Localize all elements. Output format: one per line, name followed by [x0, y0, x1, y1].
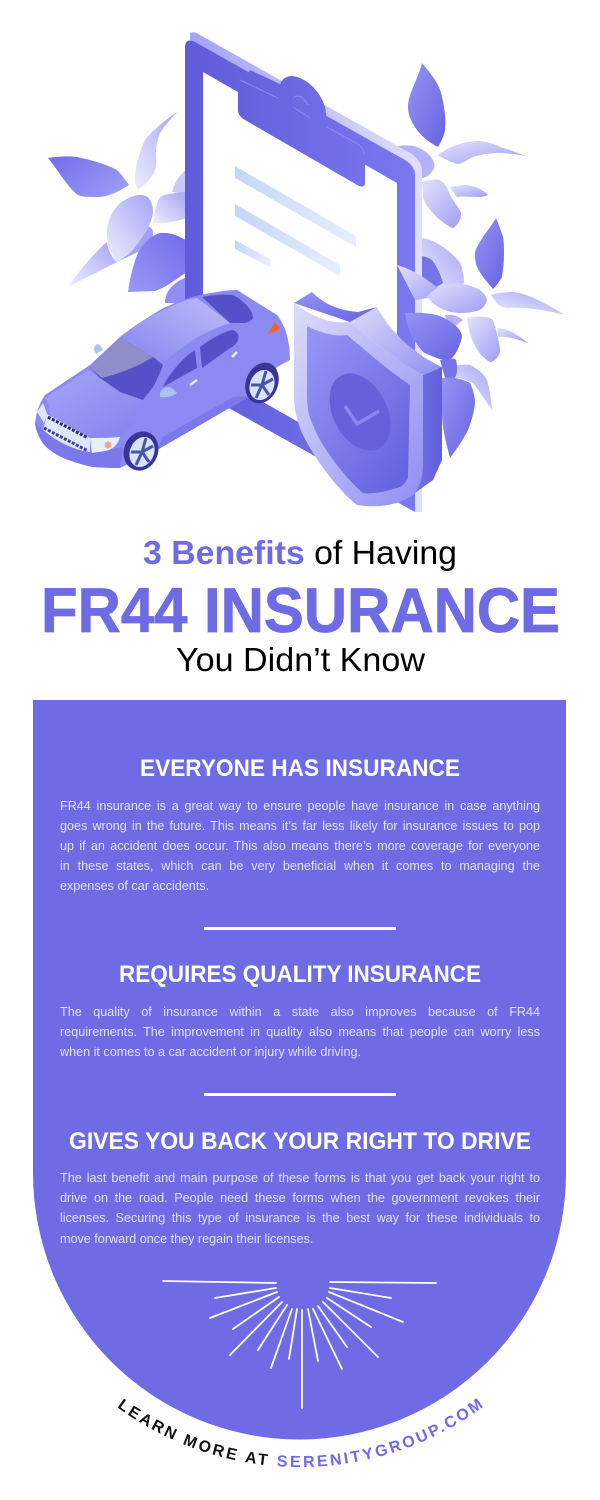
clipboard frame [185, 40, 415, 512]
shield front rim [294, 303, 423, 506]
car left headlight edge [37, 403, 47, 423]
heading: gives you back your right to drive: GIVES YOU BACK YOUR RIGHT TO DRIVE [69, 1128, 531, 1155]
text block: everyone has insurance: expenses of car accidents. [60, 879, 209, 893]
divider 1 [204, 927, 396, 930]
plant: left leaves behind clipboard [48, 112, 187, 303]
shield back top [294, 292, 377, 322]
panel: benefits [33, 700, 566, 1440]
heading: requires quality insurance: REQUIRES QUALITY INSURANCE [119, 961, 481, 988]
car hood [45, 370, 143, 437]
text block: everyone has insurance: FR44 insurance is a great way to ensure people have insurance in case anything [60, 799, 540, 813]
icon: sunburst rays [163, 1281, 436, 1408]
footer curved call to action: LEARN MORE AT SERENITYGROUP.COM [118, 1398, 483, 1468]
shield top edge [350, 307, 442, 375]
text block: everyone has insurance: up if an accident does occur. This also means there’s more coverage for everyone [60, 839, 540, 853]
car [35, 290, 290, 476]
divider 2 [204, 1093, 396, 1096]
door handles [190, 352, 237, 385]
car tail light [267, 322, 280, 335]
clipboard [185, 32, 422, 512]
text block: gives you back your right to drive: move forward once they regain their licenses. [60, 1232, 313, 1246]
panel background [33, 700, 566, 1440]
car side windows [163, 330, 238, 387]
rear wheel [239, 358, 285, 408]
text block: requires quality insurance: requirements. The improvement in quality also means that people can worry less [60, 1025, 540, 1039]
clipboard light edge [190, 32, 422, 512]
title line 1: 3 Benefits of Having [143, 534, 457, 571]
car grille [43, 414, 90, 452]
shield inner face [307, 326, 410, 493]
text block: gives you back your right to drive: The last benefit and main purpose of these forms is that you get back your right to [60, 1171, 540, 1185]
text block: everyone has insurance [60, 796, 540, 900]
shield side [412, 367, 442, 495]
clipboard paper [203, 72, 397, 478]
text block: requires quality insurance [60, 1002, 540, 1066]
clasp highlights [240, 80, 364, 155]
title line 3: You Didn’t Know [176, 641, 425, 678]
car windshield [90, 338, 163, 400]
clipboard clasp [238, 70, 397, 187]
car roof [120, 298, 230, 363]
text lines on paper [235, 166, 356, 276]
front wheel [118, 426, 164, 476]
illustration: clipboard, plants, shield and car [35, 32, 565, 512]
car headlight [90, 437, 120, 453]
plant: right leaves over clipboard [397, 265, 500, 458]
car rear window [202, 295, 253, 323]
windshield reflection [90, 338, 153, 378]
title [41, 534, 560, 678]
car front bumper [35, 423, 123, 468]
text block: gives you back your right to drive: licenses. Securing this type of insurance is the best way for these individuals to [60, 1211, 540, 1225]
icon: check mark [345, 406, 379, 424]
headlight lamp [104, 442, 112, 448]
plant: right leaves behind clipboard [398, 63, 565, 410]
car rear mirror [94, 344, 103, 354]
car side sill [157, 396, 250, 450]
heading: everyone has insurance: EVERYONE HAS INSURANCE [140, 755, 460, 782]
text block: gives you back your right to drive [60, 1168, 540, 1252]
text block: requires quality insurance: when it comes to a car accident or injury while driving. [60, 1045, 361, 1059]
text block: gives you back your right to drive: drive on the road. People need these forms when the government revokes their [60, 1191, 540, 1205]
text block: everyone has insurance: goes wrong in the future. This means it’s far less likely for insurance issues to pop [60, 819, 540, 833]
shield emblem [317, 363, 403, 461]
text block: everyone has insurance: in these states, which can be very beneficial when it comes to managing the [60, 859, 540, 873]
text block: requires quality insurance: The quality of insurance within a state also improves because of FR44 [60, 1005, 540, 1019]
shield [294, 292, 442, 506]
title line 2: FR44 INSURANCE [41, 576, 560, 646]
car side mirror [160, 387, 177, 397]
car body [35, 290, 290, 468]
